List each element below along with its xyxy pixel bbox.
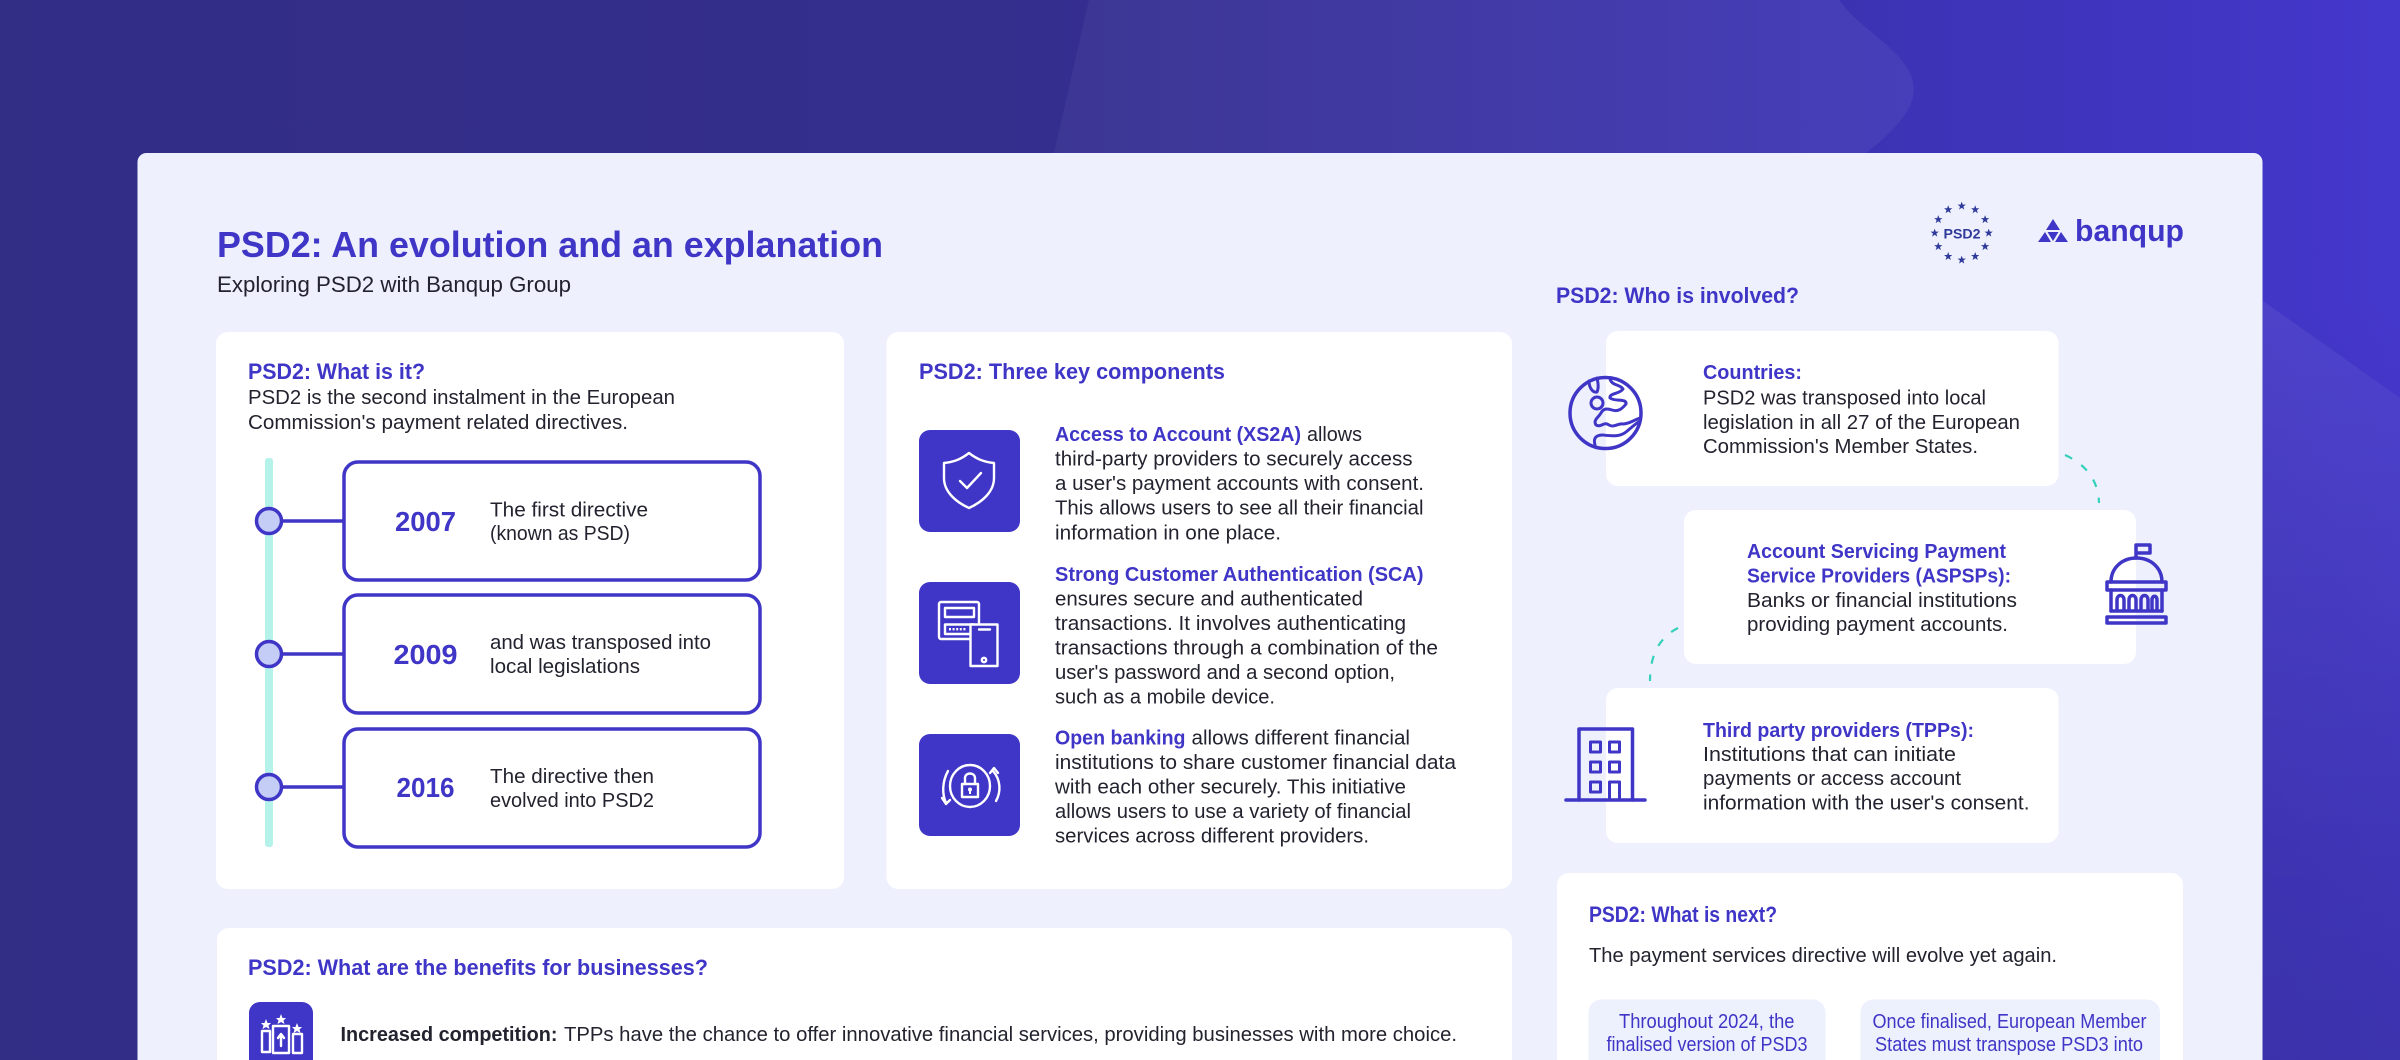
timeline item 2007: 2007 <box>395 506 456 537</box>
text: access to account <box>1055 423 1424 544</box>
callout: psd3 timing: Throughout 2024, the <box>1619 1011 1794 1033</box>
text: access to account: information in one place. <box>1055 522 1281 544</box>
timeline item 2016: 2016 <box>396 772 454 803</box>
panel: tpps: information with the user's consent. <box>1703 792 2030 814</box>
heading: benefits: PSD2: What are the benefits for businesses? <box>248 955 708 980</box>
text: strong customer authentication <box>1055 563 1438 708</box>
main panel <box>138 153 2262 1060</box>
callout: transposition: Once finalised, European Member <box>1872 1011 2147 1033</box>
text: strong customer authentication: ensures secure and authenticated <box>1055 588 1363 610</box>
timeline item 2007: The first directive <box>490 498 648 522</box>
callout: transposition: States must transpose PSD3 into <box>1875 1034 2143 1056</box>
timeline item 2009 <box>256 595 760 713</box>
logo: PSD2 stars <box>1930 202 1993 264</box>
icon: bank <box>2107 545 2166 623</box>
panel: countries: Countries: <box>1703 361 1802 384</box>
timeline item 2016: evolved into PSD2 <box>490 789 654 812</box>
panel: countries <box>1606 331 2058 486</box>
icon: card and phone <box>919 582 1020 684</box>
timeline item 2007 <box>256 462 760 580</box>
timeline item 2016: The directive then <box>490 765 654 788</box>
timeline item 2009: local legislations <box>490 655 640 678</box>
panel: aspsps: Banks or financial institutions <box>1747 589 2017 612</box>
icon: office building <box>1566 729 1645 800</box>
intro text <box>248 386 675 434</box>
timeline item 2007: (known as PSD) <box>490 522 630 545</box>
text: strong customer authentication: user's password and a second option, <box>1055 661 1395 684</box>
panel: aspsps <box>1684 510 2136 664</box>
text: access to account: allows <box>1307 423 1362 446</box>
text: open banking: with each other securely. This initiative <box>1054 776 1406 798</box>
arrow: dashed arc bottom <box>1650 628 1678 681</box>
text: open banking <box>1054 726 1457 848</box>
callout: transposition <box>1860 1000 2160 1060</box>
text: increased competition: Increased competition: <box>340 1023 558 1046</box>
text: open banking: Open banking <box>1055 726 1186 750</box>
text: access to account: Access to Account (XS2A) <box>1055 423 1301 446</box>
text: open banking: allows users to use a variety of financial <box>1055 800 1411 823</box>
panel: countries: legislation in all 27 of the European <box>1703 411 2020 434</box>
panel: what is it <box>216 332 844 889</box>
callout: psd3 timing <box>1588 1000 1826 1060</box>
text: access to account: third-party providers to securely access <box>1055 448 1412 470</box>
heading: what is it: PSD2: What is it? <box>248 359 425 384</box>
panel: aspsps: Service Providers (ASPSPs): <box>1747 564 2011 588</box>
intro text: PSD2 is the second instalment in the European <box>248 386 675 409</box>
text: next intro: The payment services directive will evolve yet again. <box>1589 944 2057 967</box>
timeline item 2016 <box>256 729 760 847</box>
intro text: Commission's payment related directives. <box>248 411 628 434</box>
heading: who is involved: PSD2: Who is involved? <box>1556 283 1799 308</box>
arrow: dashed arc top <box>2065 455 2099 503</box>
panel: tpps <box>1606 688 2058 843</box>
title: PSD2: An evolution and an explanation <box>217 224 883 265</box>
text: strong customer authentication: such as a mobile device. <box>1055 686 1275 708</box>
text: strong customer authentication: transactions through a combination of the <box>1055 636 1438 660</box>
text: open banking: institutions to share customer financial data <box>1055 751 1457 774</box>
panel: tpps: Third party providers (TPPs): <box>1703 719 1974 742</box>
panel: benefits <box>217 928 1512 1060</box>
panel: aspsps: providing payment accounts. <box>1747 613 2008 636</box>
panel: countries: Commission's Member States. <box>1703 435 1978 458</box>
icon: globe <box>1570 378 1641 448</box>
panel: tpps: Institutions that can initiate <box>1703 743 1956 766</box>
logo: banqup: banqup <box>2075 213 2184 248</box>
heading: components: PSD2: Three key components <box>919 359 1225 384</box>
text: strong customer authentication: transactions. It involves authenticating <box>1055 612 1406 635</box>
panel: what is next <box>1557 873 2183 1060</box>
callout: psd3 timing: finalised version of PSD3 <box>1606 1034 1808 1056</box>
logo: PSD2 stars: PSD2 <box>1944 226 1981 242</box>
text: access to account: a user's payment accounts with consent. <box>1055 472 1424 495</box>
timeline item 2009: 2009 <box>394 639 458 670</box>
text: access to account: This allows users to see all their financial <box>1055 496 1424 520</box>
panel: countries: PSD2 was transposed into local <box>1703 386 1986 410</box>
text: strong customer authentication: Strong Customer Authentication (SCA) <box>1055 563 1424 586</box>
timeline bar <box>265 458 273 847</box>
heading: next: PSD2: What is next? <box>1589 902 1777 927</box>
text: open banking: allows different financial <box>1192 726 1410 750</box>
icon: rotating lock <box>919 734 1020 836</box>
subtitle: Exploring PSD2 with Banqup Group <box>217 272 571 297</box>
text: open banking: services across different providers. <box>1055 824 1369 848</box>
icon: podium <box>249 1002 313 1060</box>
text: increased competition: TPPs have the chance to offer innovative financial services, providing businesses with more choice. <box>564 1023 1457 1046</box>
panel: three key components <box>886 332 1512 889</box>
panel: tpps: payments or access account <box>1703 767 1961 790</box>
panel: aspsps: Account Servicing Payment <box>1747 540 2006 563</box>
icon: shield <box>919 430 1020 532</box>
timeline item 2009: and was transposed into <box>490 631 711 654</box>
